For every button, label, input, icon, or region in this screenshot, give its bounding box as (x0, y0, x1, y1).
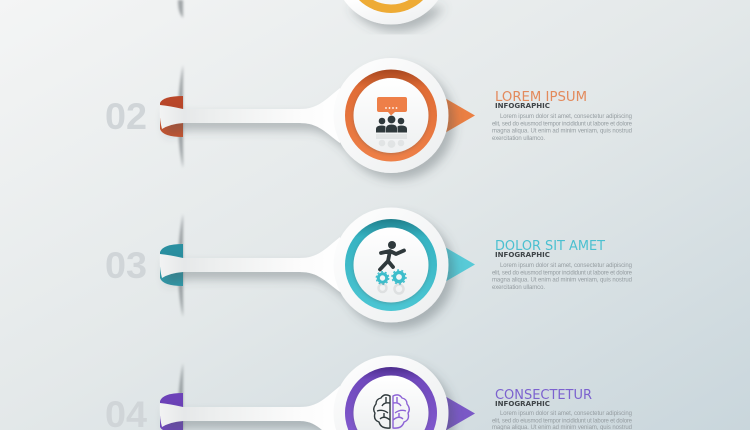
pointer arrow 03 (443, 246, 475, 283)
body 04: Lorem ipsum dolor sit amet, consectetur adipiscing (500, 411, 632, 417)
pointer arrow 02 (443, 97, 475, 134)
text block 03 (492, 239, 633, 291)
slit 01 (178, 0, 183, 18)
ribbon fold 04 (160, 393, 183, 430)
inner disc 04 (354, 375, 428, 430)
body 03 (492, 263, 633, 291)
subheading 03: INFOGRAPHIC (495, 251, 550, 259)
heading 04: CONSECTETUR (495, 388, 592, 403)
ring 03 (345, 219, 437, 311)
inner disc 01 (373, 0, 409, 4)
body 04 (492, 411, 633, 430)
ring 02 (345, 70, 437, 162)
subheading 04: INFOGRAPHIC (495, 400, 550, 408)
circle 01 (344, 0, 438, 25)
ring 04 (345, 367, 437, 430)
slit 04 (178, 363, 183, 430)
inner disc 02 (354, 78, 428, 153)
heading 02: LOREM IPSUM (495, 90, 587, 105)
subheading 02: INFOGRAPHIC (495, 102, 550, 110)
pin shape 03 (160, 208, 448, 322)
pin shape 02 (160, 58, 448, 173)
step 04 (105, 356, 633, 430)
number 03: 03 (105, 245, 147, 286)
icon: brain (374, 395, 409, 428)
body 02: exercitation ullamco. (492, 136, 545, 142)
step 03 (105, 208, 633, 322)
body 03: elit, sed do eiusmod tempor incididunt ut labore et dolore (492, 270, 633, 276)
inner disc 03 (354, 228, 428, 302)
body 02 (492, 114, 633, 142)
ribbon fold 03 (160, 244, 183, 286)
pin shape 04 (160, 356, 449, 430)
ring 01 (359, 0, 423, 13)
number 02: 02 (105, 96, 147, 137)
heading 03: DOLOR SIT AMET (495, 239, 605, 254)
body 02: Lorem ipsum dolor sit amet, consectetur adipiscing (500, 114, 632, 120)
text block 04 (492, 388, 633, 430)
icon: runner on gears (376, 241, 406, 294)
text block 02 (492, 90, 633, 142)
step 01 (cropped at top) (178, 0, 438, 25)
slit 03 (178, 214, 183, 317)
ribbon fold 02 (160, 96, 183, 137)
body 02: magna aliqua. Ut enim ad minim veniam, quis nostrud (492, 128, 632, 134)
slit 02 (178, 65, 183, 168)
body 03: Lorem ipsum dolor sit amet, consectetur adipiscing (500, 263, 632, 269)
body 04: elit, sed do eiusmod tempor incididunt ut labore et dolore (492, 418, 633, 424)
body 02: elit, sed do eiusmod tempor incididunt ut labore et dolore (492, 122, 633, 128)
body 03: exercitation ullamco. (492, 285, 545, 291)
step 02 (105, 58, 633, 173)
body 03: magna aliqua. Ut enim ad minim veniam, quis nostrud (492, 278, 632, 284)
pointer arrow 04 (443, 395, 475, 430)
icon: speech bubble and people (376, 97, 407, 148)
